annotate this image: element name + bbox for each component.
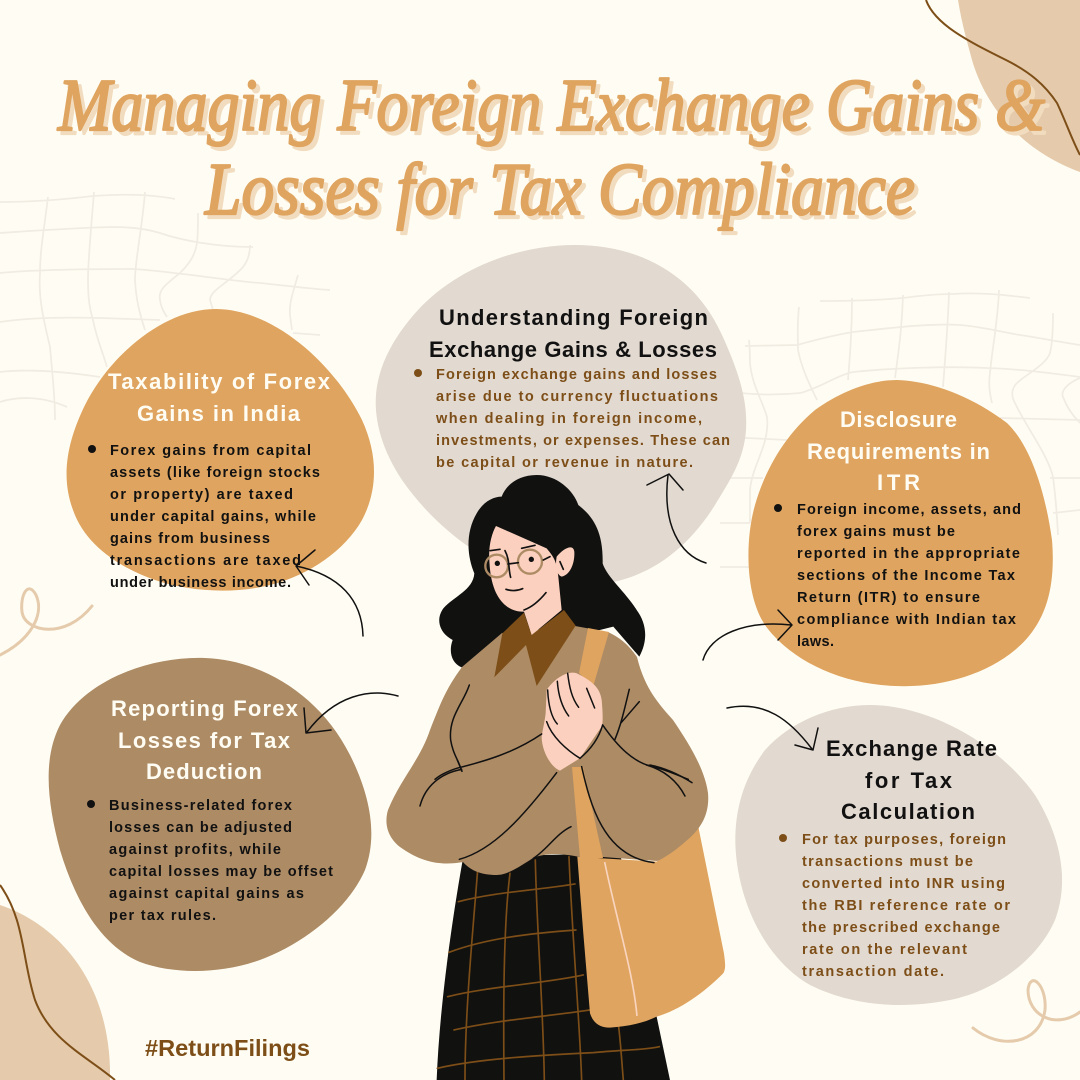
panel: taxability of forex gains in India (67, 309, 374, 591)
sweater fold lines (420, 760, 692, 863)
heading: Deduction (146, 759, 262, 784)
shoulder bag (577, 827, 725, 1028)
collar (494, 610, 576, 686)
bullet text: Business-related forex (109, 798, 292, 814)
bullet text: Return (ITR) to ensure (797, 590, 980, 606)
bullet text: or property) are taxed (110, 487, 293, 503)
bullet text: assets (like foreign stocks (110, 465, 320, 481)
hair (439, 475, 645, 667)
title: Losses for Tax Compliance (204, 149, 915, 231)
arrow: to reporting panel (304, 693, 398, 733)
hashtag: #ReturnFilings (145, 1035, 310, 1061)
bullet text (414, 367, 730, 471)
bullet text: arise due to currency fluctuations (436, 389, 718, 405)
heading: Disclosure (840, 407, 957, 432)
bullet text: under business income. (110, 575, 291, 591)
arrow: to understanding panel (647, 474, 706, 563)
heading: Reporting Forex (111, 696, 299, 721)
panel: understanding foreign exchange gains and losses (376, 245, 746, 585)
panel: disclosure requirements in ITR (748, 380, 1053, 686)
bullet text: against profits, while (109, 842, 281, 858)
bullet text: rate on the relevant (802, 942, 967, 958)
bullet text: transaction date. (802, 964, 944, 980)
title: Losses for Tax Compliance (208, 153, 919, 235)
bullet text (774, 502, 1021, 650)
arrow: to exchange rate panel (727, 706, 818, 750)
bag strap (572, 628, 609, 858)
bullet text: investments, or expenses. These can (436, 433, 730, 449)
decorative squiggle: bottom right (973, 981, 1080, 1041)
clasped hand (435, 673, 688, 779)
bullet text: the prescribed exchange (802, 920, 1000, 936)
bullet text: forex gains must be (797, 524, 955, 540)
sweater (386, 626, 708, 875)
bullet text (87, 798, 333, 924)
panel: reporting forex losses for tax deduction (49, 658, 371, 971)
bullet text: capital losses may be offset (109, 864, 333, 880)
bullet text: laws. (797, 634, 834, 650)
heading: Taxability of Forex (108, 369, 331, 394)
bullet text: against capital gains as (109, 886, 304, 902)
heading: ITR (877, 470, 920, 495)
bullet text: Foreign exchange gains and losses (436, 367, 717, 383)
bullet text: Foreign income, assets, and (797, 502, 1021, 518)
bullet text: under capital gains, while (110, 509, 316, 525)
heading (111, 696, 299, 784)
bullet text: transactions are taxed (110, 553, 301, 569)
bullet text: transactions must be (802, 854, 973, 870)
arrow: to disclosure panel (703, 610, 792, 660)
glasses (485, 545, 563, 610)
bullet text: Forex gains from capital (110, 443, 311, 459)
bullet text: compliance with Indian tax (797, 612, 1016, 628)
skirt (437, 853, 670, 1080)
heading: Exchange Gains & Losses (429, 337, 717, 362)
heading: Calculation (841, 799, 975, 824)
decorative corner blob: top right (926, 0, 1080, 172)
bullet text: be capital or revenue in nature. (436, 455, 693, 471)
decorative corner blob: bottom left (0, 885, 115, 1080)
title (57, 65, 1049, 235)
bullet text: losses can be adjusted (109, 820, 292, 836)
bullet text: the RBI reference rate or (802, 898, 1010, 914)
bullet text: gains from business (110, 531, 270, 547)
heading (429, 305, 717, 362)
bullet text: converted into INR using (802, 876, 1005, 892)
heading: Losses for Tax (118, 728, 291, 753)
face (485, 526, 576, 686)
arrow: to taxability panel (296, 550, 363, 636)
bullet text: For tax purposes, foreign (802, 832, 1006, 848)
bullet text: sections of the Income Tax (797, 568, 1015, 584)
decorative squiggle: left (0, 589, 92, 655)
heading: Exchange Rate (826, 736, 997, 761)
panel: exchange rate for tax calculation (735, 705, 1062, 1005)
heading: Requirements in (807, 439, 990, 464)
heading: Gains in India (137, 401, 301, 426)
heading: for Tax (865, 768, 953, 793)
bullet text: per tax rules. (109, 908, 216, 924)
heading (826, 736, 997, 824)
heading: Understanding Foreign (439, 305, 708, 330)
illustration: woman with shoulder bag (386, 475, 725, 1080)
bullet text: when dealing in foreign income, (435, 411, 702, 427)
bullet text (779, 832, 1010, 980)
bullet text (88, 443, 320, 591)
heading (108, 369, 331, 426)
heading (807, 407, 990, 495)
bullet text: reported in the appropriate (797, 546, 1020, 562)
